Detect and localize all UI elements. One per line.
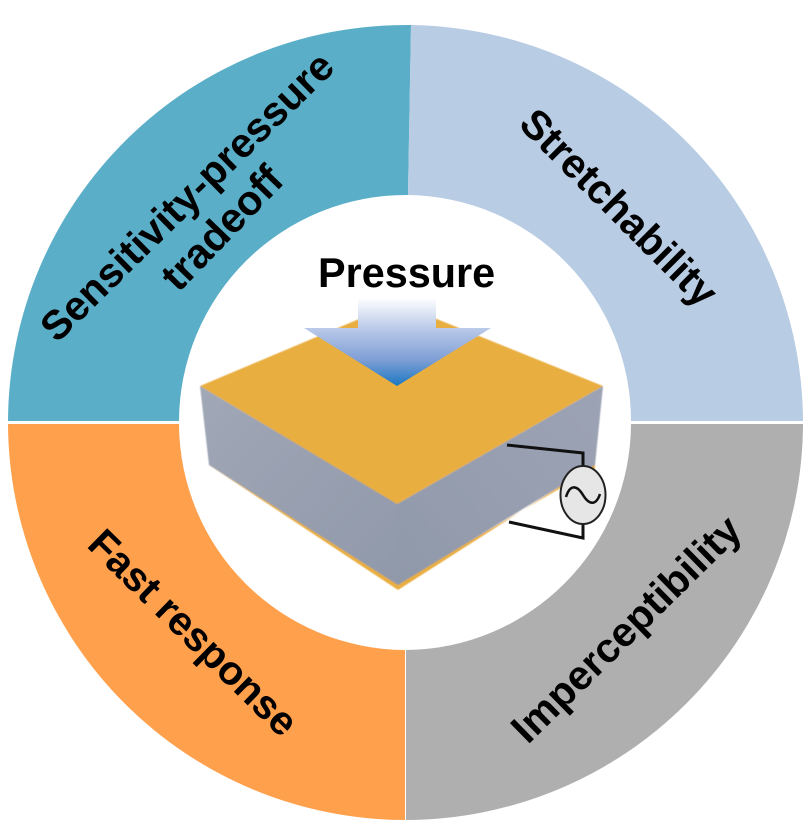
wires and AC source — [507, 445, 606, 538]
label: sensitivity-pressure tradeoff: Sensitivity-pressure — [31, 43, 343, 350]
label: imperceptibility: Imperceptibility — [502, 506, 750, 752]
panel: fast response — [8, 424, 405, 820]
panel: stretchability — [408, 25, 803, 421]
right side of dielectric — [397, 386, 603, 585]
left side of dielectric — [200, 386, 398, 585]
panel: sensitivity-pressure tradeoff — [8, 25, 411, 421]
diagram: sensor block under pressure — [200, 250, 606, 590]
top electrode — [200, 303, 603, 504]
label: fast response: Fast response — [79, 520, 308, 745]
block body — [200, 303, 603, 590]
bottom electrode — [209, 463, 595, 590]
label: sensitivity-pressure tradeoff: tradeoff — [151, 156, 292, 300]
heading: pressure: Pressure — [318, 250, 495, 296]
arrow: pressure direction — [304, 298, 491, 386]
label: stretchability: Stretchability — [511, 99, 727, 316]
panel: imperceptibility — [406, 424, 803, 820]
